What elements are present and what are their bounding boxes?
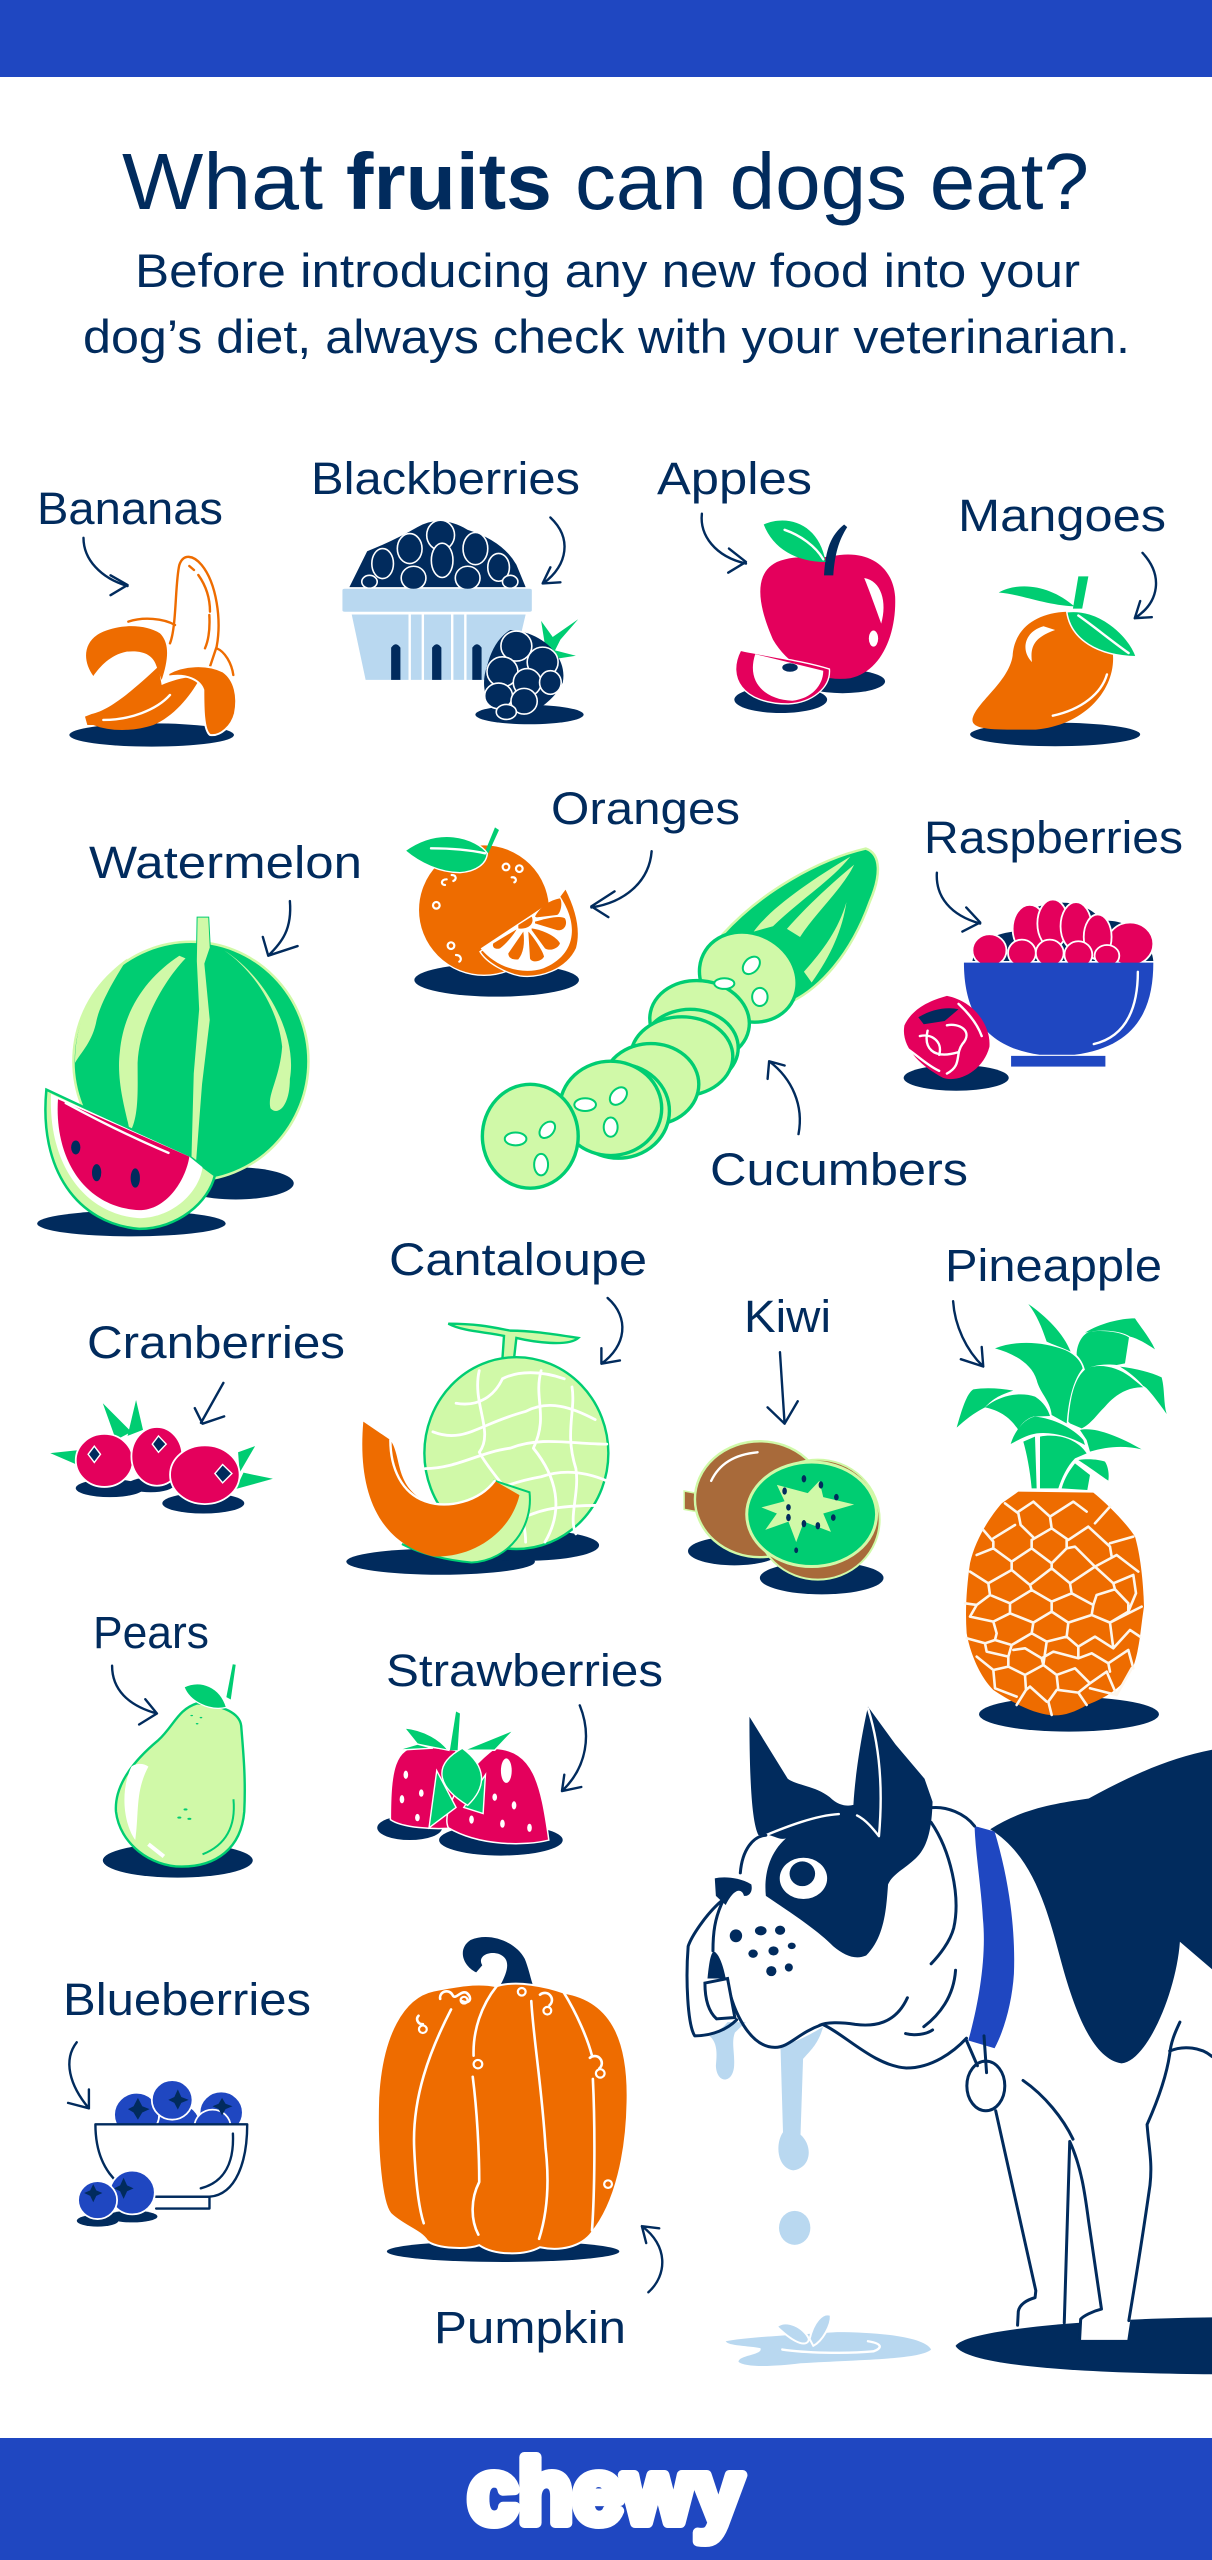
arrow: pumpkin (642, 2226, 662, 2292)
icon: pineapple (957, 1304, 1167, 1732)
dog head (687, 1707, 975, 2068)
subtitle: dog’s diet, always check with your veterinarian. (83, 310, 1130, 363)
icon: cucumber (482, 849, 878, 1188)
icon: blackberry basket (342, 520, 584, 724)
arrow: apples (702, 514, 746, 573)
panel: cranberries (50, 1317, 345, 1513)
panel: pears (93, 1607, 253, 1878)
panel: oranges (405, 783, 740, 997)
arrow: pears (112, 1666, 157, 1725)
title: What (122, 137, 323, 226)
icon: blueberries bowl (77, 2080, 247, 2227)
panel: cucumbers (482, 849, 968, 1195)
panel: raspberries (904, 812, 1183, 1091)
label: oranges: Oranges (551, 783, 740, 834)
arrow: cranberries (195, 1383, 224, 1424)
panel: apples (657, 453, 895, 713)
label: kiwi: Kiwi (744, 1291, 831, 1342)
icon: pumpkin (378, 1937, 628, 2262)
icon: watermelon (37, 917, 308, 1236)
logo: chewy: chewy (468, 2442, 743, 2543)
puddle (726, 2314, 931, 2366)
arrow: pineapple (953, 1301, 983, 1367)
icon: apple (734, 521, 895, 713)
arrow: mangoes (1135, 553, 1156, 618)
label: apples: Apples (657, 453, 812, 504)
label: blackberries: Blackberries (311, 453, 580, 504)
panel: strawberries (377, 1645, 663, 1856)
label: pears: Pears (93, 1607, 209, 1658)
panel: cantaloupe (346, 1234, 647, 1575)
label: cucumbers: Cucumbers (710, 1144, 968, 1195)
panel: mangoes (958, 490, 1166, 746)
label: watermelon: Watermelon (89, 837, 362, 888)
label: cranberries: Cranberries (87, 1317, 345, 1368)
label: pineapple: Pineapple (945, 1240, 1162, 1291)
arrow: oranges (591, 851, 652, 917)
icon: banana (69, 557, 236, 747)
panel: kiwi (684, 1291, 884, 1594)
title: fruits (346, 137, 552, 226)
label: strawberries: Strawberries (386, 1645, 663, 1696)
drool (709, 2022, 823, 2245)
icon: pear (103, 1665, 253, 1878)
panel: watermelon (37, 837, 362, 1236)
icon: cranberries (50, 1400, 273, 1513)
arrow: raspberries (937, 873, 980, 932)
top blue band (0, 0, 1212, 77)
panel: blueberries (63, 1974, 311, 2227)
collar and tag (966, 1826, 1014, 2111)
footer blue band (0, 2438, 1212, 2560)
panel: bananas (37, 483, 236, 747)
icon: cantaloupe (346, 1324, 608, 1575)
label: blueberries: Blueberries (63, 1974, 311, 2025)
icon: orange (405, 827, 579, 997)
arrow: kiwi (768, 1352, 798, 1424)
icon: kiwi (684, 1441, 884, 1594)
panel: blackberries (311, 453, 584, 724)
title (122, 137, 1089, 226)
title: can dogs eat? (575, 137, 1089, 226)
arrow: bananas (83, 538, 128, 595)
arrow: strawberries (562, 1705, 586, 1791)
label: bananas: Bananas (37, 483, 223, 534)
panel: pineapple (945, 1240, 1167, 1732)
label: mangoes: Mangoes (958, 490, 1166, 541)
body saddle (990, 1750, 1212, 2063)
subtitle: Before introducing any new food into your (135, 244, 1080, 297)
subtitle (83, 244, 1130, 363)
arrow: cantaloupe (601, 1298, 622, 1364)
ground shadow (956, 2317, 1212, 2374)
label: raspberries: Raspberries (924, 812, 1183, 863)
dog illustration (687, 1707, 1212, 2374)
icon: strawberries (377, 1711, 563, 1856)
icon: mango (970, 576, 1140, 746)
label: cantaloupe: Cantaloupe (389, 1234, 647, 1285)
arrow: cucumbers (768, 1061, 800, 1134)
arrow: blueberries (68, 2042, 89, 2108)
arrow: blackberries (543, 517, 565, 583)
legs (996, 2022, 1212, 2340)
label: pumpkin: Pumpkin (434, 2302, 626, 2353)
arrow: watermelon (263, 901, 298, 956)
icon: raspberries bowl (904, 899, 1153, 1091)
panel: pumpkin (378, 1937, 662, 2353)
